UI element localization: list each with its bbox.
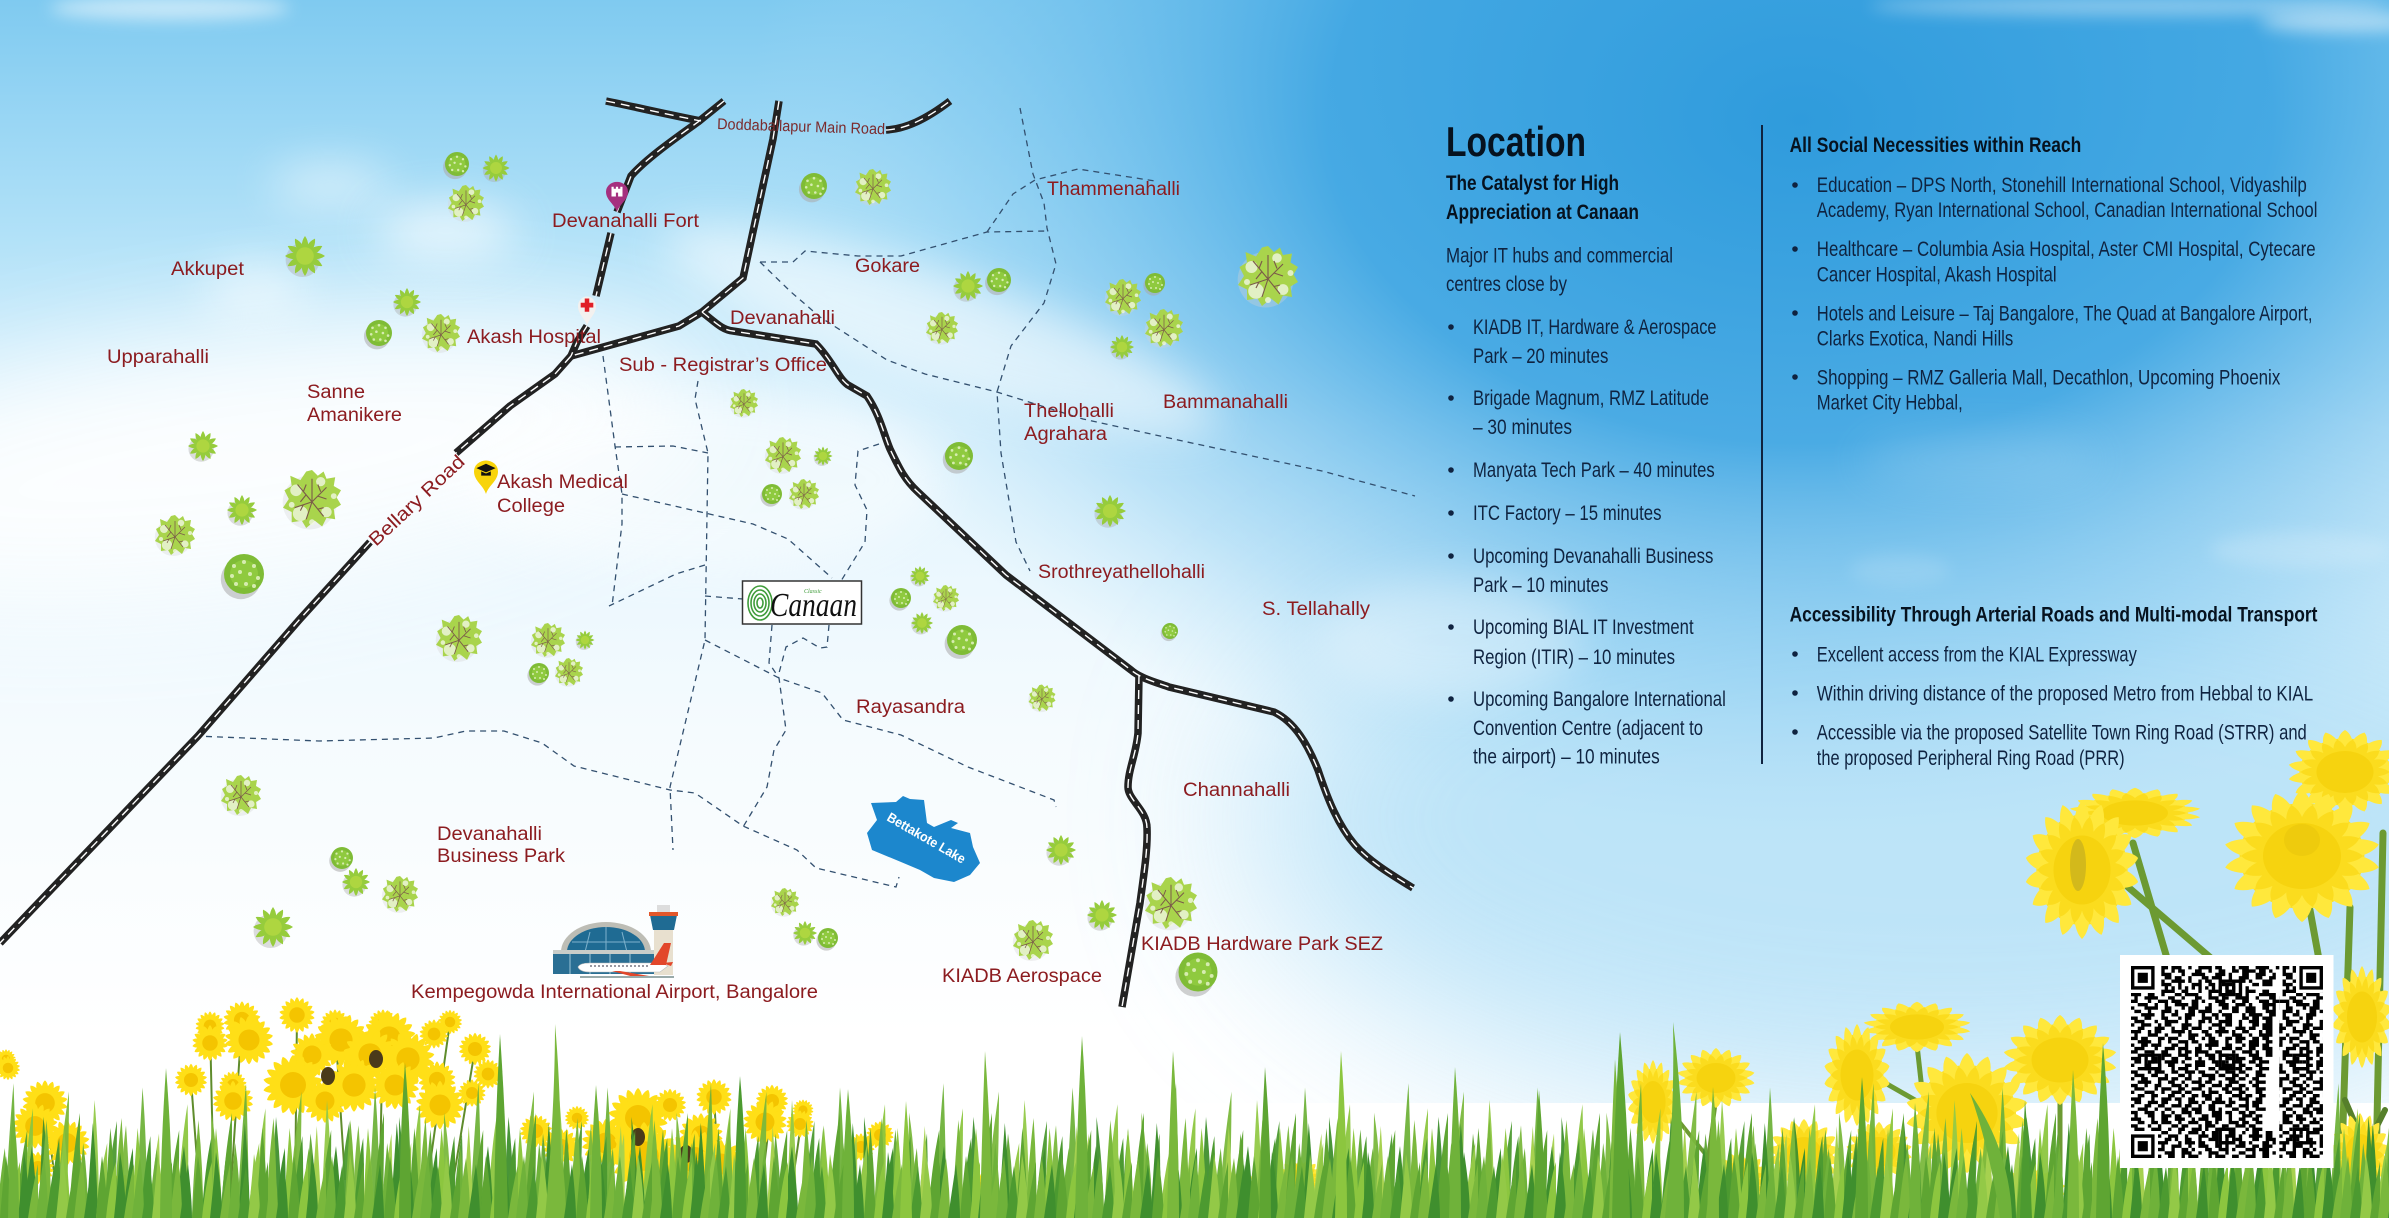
icon: Akash Medical College pin: [474, 461, 498, 494]
dashed local roads: [195, 108, 1415, 887]
bullet list: commercial hubs: Brigade Magnum, RMZ Latitude: [1473, 387, 1709, 410]
label: Thellohalli Agrahara: Thellohalli: [1024, 401, 1114, 422]
label: Devanahalli Business Park: Devanahalli: [437, 824, 542, 845]
label: Doddaballapur Main Road: Doddaballapur Main Road: [717, 116, 885, 138]
label: Bammanahalli: Bammanahalli: [1163, 392, 1288, 413]
icon: Devanahalli Fort pin: [606, 182, 628, 212]
label: Akash Medical College: College: [497, 496, 565, 517]
bullet list: commercial hubs: Park – 10 minutes: [1473, 574, 1608, 597]
heading: social necessities: All Social Necessities within Reach: [1790, 134, 2081, 157]
label: Akash Medical College: [497, 472, 628, 517]
bullet list: commercial hubs: Park – 20 minutes: [1473, 345, 1608, 368]
right yellow flowers: [1222, 730, 2389, 1214]
heading: Location: Location: [1446, 118, 1586, 165]
label: KIADB Hardware Park SEZ: KIADB Hardware Park SEZ: [1141, 934, 1383, 955]
bullet list: commercial hubs: Region (ITIR) – 10 minutes: [1473, 646, 1675, 669]
main roads: [0, 101, 1413, 1007]
icon: Canaan logo: Canaan: [770, 587, 857, 624]
bullet list: commercial hubs: Convention Centre (adjacent to: [1473, 717, 1703, 740]
bullet list: commercial hubs: Upcoming BIAL IT Investment: [1473, 616, 1694, 639]
bullet list: commercial hubs: Upcoming Bangalore International: [1473, 688, 1726, 711]
bullet list: social necessities: Cancer Hospital, Akash Hospital: [1817, 263, 2057, 286]
label: Devanahalli: Devanahalli: [730, 308, 835, 329]
label: Bellary Road: Bellary Road: [365, 451, 469, 551]
label: Thellohalli Agrahara: [1024, 401, 1114, 445]
bullet list: accessibility: the proposed Peripheral Ring Road (PRR): [1817, 747, 2125, 770]
label: Sanne Amanikere: [307, 382, 402, 426]
bullet list: social necessities: Shopping – RMZ Galleria Mall, Decathlon, Upcoming Phoenix: [1817, 366, 2281, 390]
panel: accessibility: [1790, 604, 2317, 770]
road map network: [0, 101, 1415, 1007]
bullet list: accessibility: [1792, 644, 2313, 770]
left yellow flower clusters: [0, 997, 1434, 1218]
label: Srothreyathellohalli: Srothreyathellohalli: [1038, 562, 1205, 583]
label: Akash Hospital: Akash Hospital: [467, 327, 601, 348]
panel: social necessities: [1790, 134, 2317, 415]
label: Thammenahalli: Thammenahalli: [1047, 179, 1180, 200]
bullet list: social necessities: [1792, 174, 2317, 415]
intro text: Major IT hubs and commercial: [1446, 245, 1673, 268]
grass: [0, 1022, 2389, 1218]
label: Sub-Registrar's Office: Sub - Registrar’s Office: [619, 355, 827, 376]
bullet list: commercial hubs: ITC Factory – 15 minutes: [1473, 502, 1662, 525]
Bettakote Lake: [867, 796, 980, 882]
label: Channahalli: Channahalli: [1183, 780, 1290, 801]
bullet list: social necessities: Market City Hebbal,: [1817, 392, 1963, 415]
intro text: [1446, 245, 1673, 296]
column divider: [1761, 125, 1763, 764]
map labels: [107, 116, 1383, 1003]
label: Kempegowda International Airport: Kempegowda International Airport, Bangalore: [411, 982, 818, 1003]
label: Devanahalli Business Park: [437, 824, 566, 867]
bullet list: social necessities: Clarks Exotica, Nandi Hills: [1817, 327, 2013, 350]
label: Thellohalli Agrahara: Agrahara: [1024, 424, 1107, 445]
label: Gokare: Gokare: [855, 256, 920, 277]
QR code: [2120, 955, 2334, 1168]
subheading: catalyst: Appreciation at Canaan: [1446, 201, 1639, 224]
label: Devanahalli Fort: Devanahalli Fort: [552, 211, 700, 232]
right flower stems: [1670, 833, 2385, 1218]
subheading: catalyst: [1446, 172, 1639, 224]
label: Devanahalli Business Park: Business Park: [437, 846, 566, 867]
label: Rayasandra: Rayasandra: [856, 697, 965, 718]
label: S. Tellahally: S. Tellahally: [1262, 599, 1371, 620]
panel: location text column: [1446, 118, 1726, 768]
label: Sanne Amanikere: Sanne: [307, 382, 365, 403]
subheading: catalyst: The Catalyst for High: [1446, 172, 1619, 195]
bullet list: commercial hubs: [1448, 316, 1726, 768]
map trees: [155, 152, 1298, 997]
icon: Canaan logo: [742, 581, 862, 624]
label: Akash Medical College: Akash Medical: [497, 472, 628, 493]
label: KIADB Aerospace: KIADB Aerospace: [942, 966, 1102, 987]
intro text: centres close by: [1446, 273, 1567, 296]
bullet list: commercial hubs: – 30 minutes: [1473, 416, 1572, 439]
Bettakote Lake: Bettakote Lake: [884, 810, 969, 867]
label: Akkupet: Akkupet: [171, 259, 245, 280]
bullet list: commercial hubs: Manyata Tech Park – 40 minutes: [1473, 459, 1715, 482]
bullet list: commercial hubs: the airport) – 10 minutes: [1473, 746, 1660, 768]
bullet list: accessibility: Excellent access from the KIAL Expressway: [1817, 644, 2137, 667]
label: Upparahalli: Upparahalli: [107, 347, 209, 368]
label: Sanne Amanikere: Amanikere: [307, 405, 402, 426]
bullet list: commercial hubs: KIADB IT, Hardware & Aerospace: [1473, 316, 1716, 339]
icon: Akash Hospital pin: [578, 297, 596, 326]
icon: airport terminal with tower and plane: [553, 905, 678, 978]
bullet list: commercial hubs: Upcoming Devanahalli Business: [1473, 545, 1713, 568]
icon: Canaan logo: Classic: [804, 589, 822, 595]
